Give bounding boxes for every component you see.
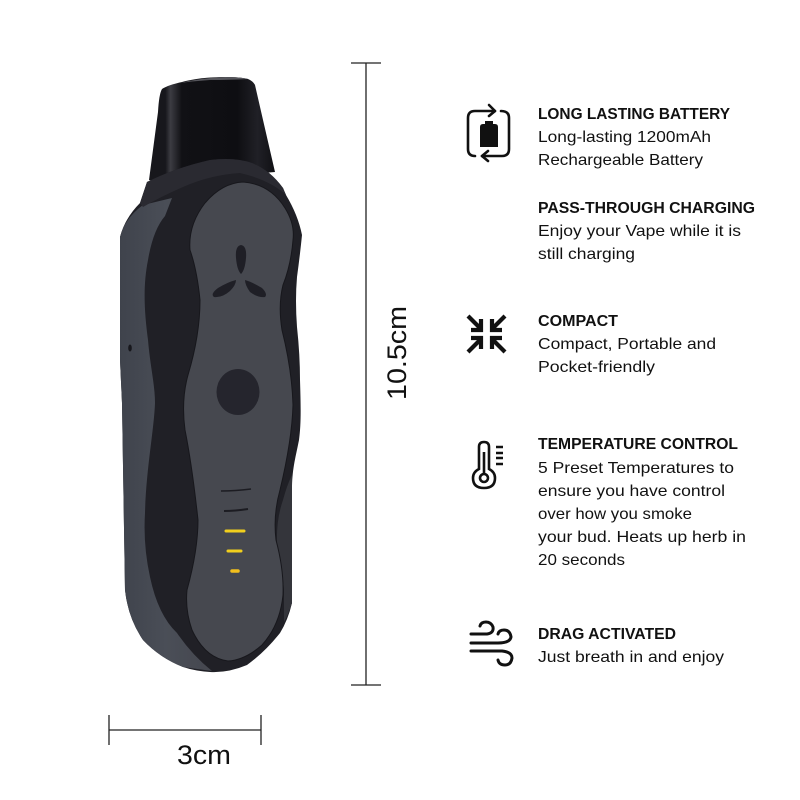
dimension: width 3cm: 3cm — [177, 740, 231, 770]
dimension: width 3cm — [109, 715, 261, 770]
icon: thermometer — [473, 442, 503, 488]
feature text: long lasting battery: Rechargeable Battery — [538, 152, 703, 169]
feature text: long lasting battery — [538, 106, 730, 169]
feature text: compact — [538, 313, 716, 376]
dimension: height 10.5cm — [351, 63, 412, 685]
feature text: temperature control: your bud. Heats up herb in — [538, 529, 746, 546]
feature text: drag activated — [538, 626, 724, 666]
feature text: temperature control: over how you smoke — [538, 506, 692, 523]
side pinhole — [128, 344, 132, 352]
feature text: drag activated: DRAG ACTIVATED — [538, 626, 676, 643]
feature text: temperature control: 20 seconds — [538, 552, 625, 569]
feature text: temperature control: TEMPERATURE CONTROL — [538, 436, 738, 453]
dark collar band — [140, 159, 286, 207]
feature text: long lasting battery: LONG LASTING BATTERY — [538, 106, 730, 123]
feature text: temperature control: ensure you have control — [538, 483, 725, 500]
right side lower shading — [277, 475, 292, 622]
LED indicators — [221, 489, 251, 571]
device body shell — [120, 159, 302, 672]
dimension: height 10.5cm: 10.5cm — [382, 306, 412, 400]
mouthpiece — [149, 77, 275, 185]
air vents — [213, 245, 266, 297]
mouthpiece top highlight — [180, 77, 248, 83]
feature text: long lasting battery: Long-lasting 1200mAh — [538, 129, 711, 146]
feature text: compact: COMPACT — [538, 313, 618, 330]
feature text: temperature control: 5 Preset Temperatures to — [538, 460, 734, 477]
grey left side strip — [120, 198, 212, 671]
power button — [216, 369, 260, 415]
icon: wind — [471, 622, 512, 665]
feature text: drag activated: Just breath in and enjoy — [538, 649, 724, 666]
feature text: pass-through charging: still charging — [538, 246, 635, 263]
feature text: temperature control — [538, 436, 746, 569]
feature text: compact: Compact, Portable and — [538, 336, 716, 353]
icon: battery — [468, 105, 509, 161]
device illustration — [120, 77, 302, 672]
feature text: pass-through charging: Enjoy your Vape while it is — [538, 223, 741, 240]
feature text: compact: Pocket-friendly — [538, 359, 655, 376]
feature text: pass-through charging: PASS-THROUGH CHARGING — [538, 200, 755, 217]
grey front panel — [184, 182, 293, 661]
icon: compact arrows — [468, 316, 505, 352]
feature text: pass-through charging — [538, 200, 755, 263]
